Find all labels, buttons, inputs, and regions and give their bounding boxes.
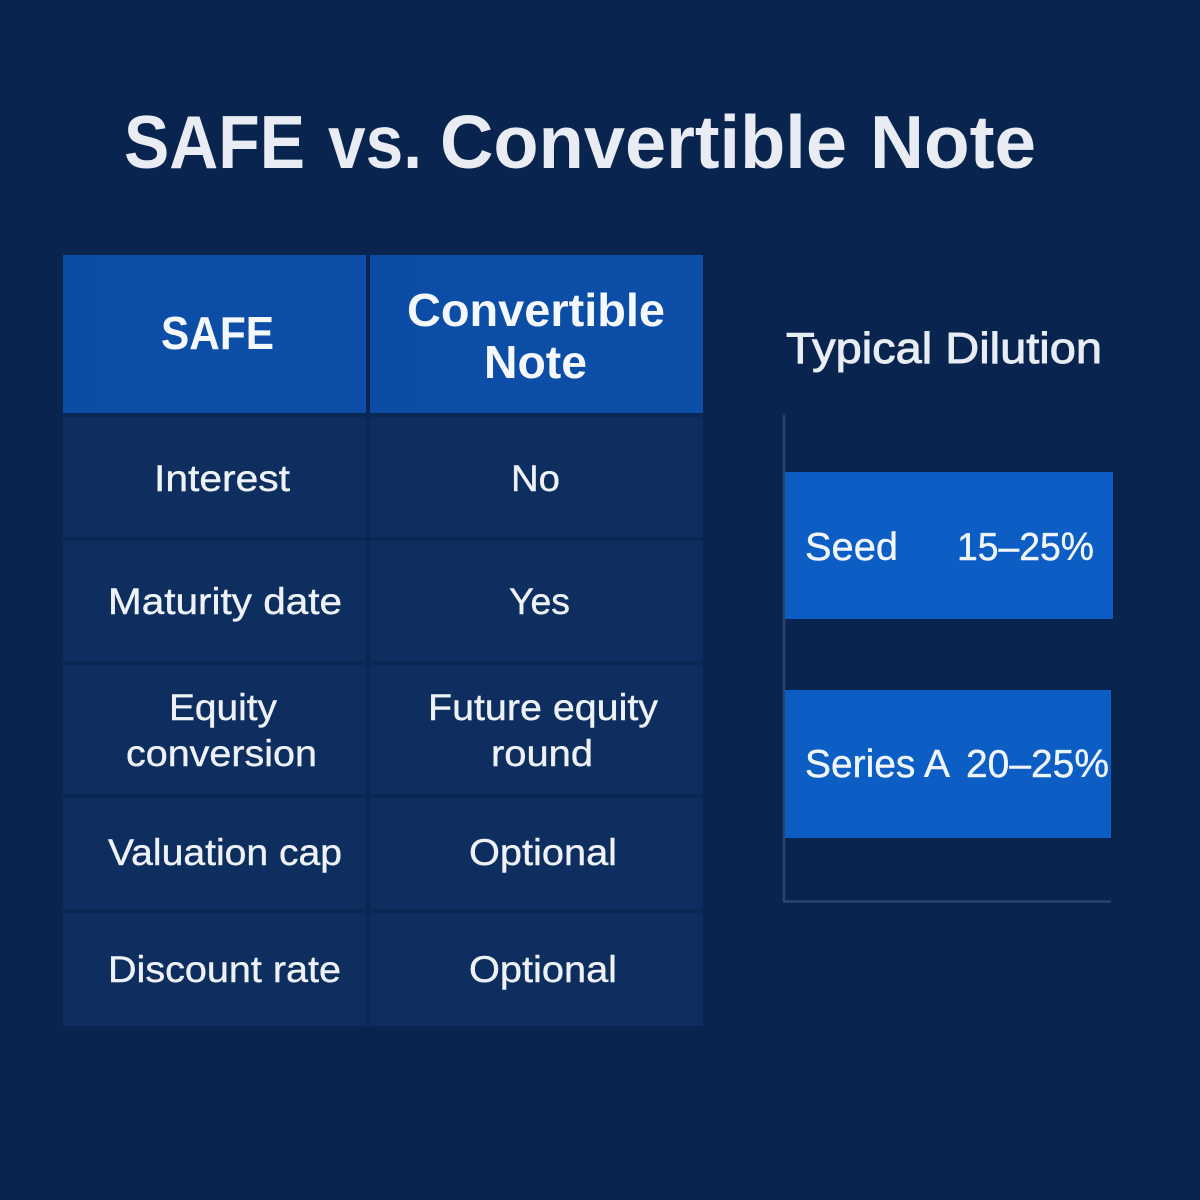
table header: SAFE [63,255,366,413]
chart axes [784,415,1111,902]
row: Valuation cap [63,798,703,909]
bar chart: typical dilution [784,415,1113,902]
bar: Seed [785,472,1113,619]
title [124,100,1036,184]
bar: Seed: 15–25% [957,526,1094,569]
bar: Series A: Series A [805,743,950,786]
table header: Convertible Note: Note [484,336,587,388]
row: Interest [63,417,703,537]
row: Maturity date [63,541,703,661]
row: Discount rate: Optional [469,949,617,990]
row: Maturity date: Maturity date [108,581,342,622]
row: Equity conversion: round [491,733,593,774]
table grid backing [63,413,703,1026]
row: Valuation cap: Valuation cap [108,832,342,873]
table header: Convertible Note: Convertible [407,284,665,336]
table header: SAFE: SAFE [161,307,274,359]
row: Interest: No [511,458,560,499]
table header: Convertible Note [370,255,703,413]
bar: Seed: Seed [805,526,898,569]
chart heading: Typical Dilution: Typical Dilution [786,324,1102,373]
title: vs. [328,100,422,184]
row: Equity conversion: conversion [126,733,317,774]
row: Valuation cap: Optional [469,832,617,873]
bar: Series A: 20–25% [966,743,1109,786]
panel: comparison table [63,255,703,1026]
title: Note [870,100,1036,184]
row: Discount rate [63,913,703,1026]
row: Maturity date: Yes [509,581,570,622]
title: SAFE [124,100,305,184]
row: Interest: Interest [154,458,291,499]
title: Convertible [440,100,847,184]
row: Equity conversion: Equity [169,687,278,728]
bar: Series A [785,690,1111,838]
row: Equity conversion [63,665,703,794]
row: Equity conversion: Future equity [428,687,659,728]
row: Discount rate: Discount rate [108,949,341,990]
